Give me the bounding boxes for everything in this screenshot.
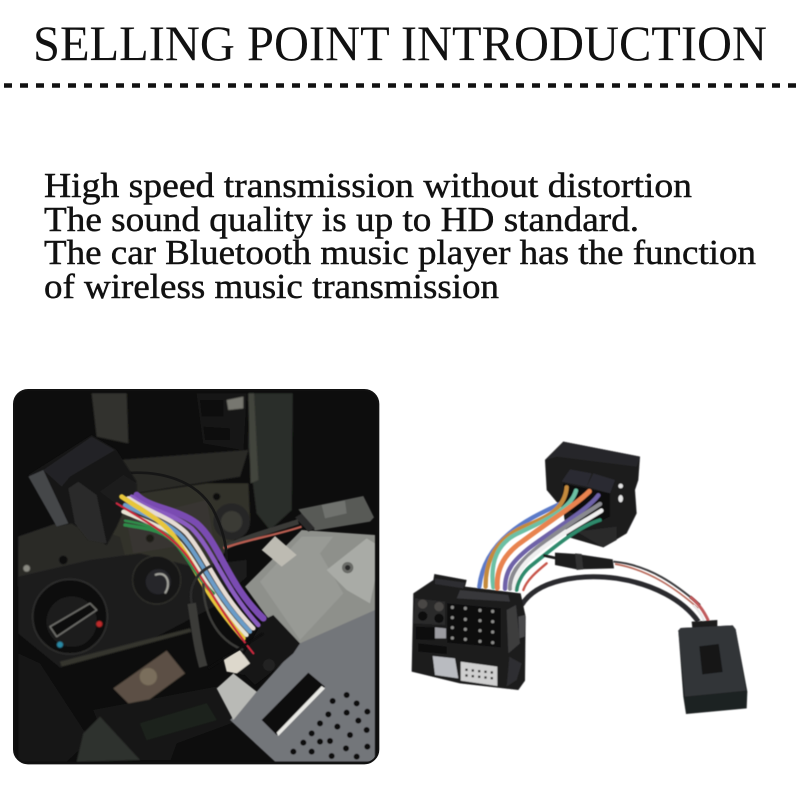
knob: lights xyxy=(133,556,181,604)
text block: selling point description: The sound quality is up to HD standard. xyxy=(44,200,639,239)
knob: upper xyxy=(213,503,250,540)
pillar xyxy=(248,393,293,530)
lower control panel xyxy=(18,553,247,670)
upper vent area xyxy=(92,393,128,443)
main connector xyxy=(412,574,526,690)
knob: temperature xyxy=(33,579,107,654)
text block: selling point description: High speed transmission without distortion xyxy=(44,166,692,205)
panel: bluetooth module xyxy=(678,597,747,714)
wire bundle xyxy=(479,487,601,590)
aux jack xyxy=(191,565,263,668)
text block: selling point description: of wireless music transmission xyxy=(44,267,499,306)
pocket xyxy=(60,651,124,670)
lower console xyxy=(93,687,240,760)
wire bundle xyxy=(117,495,263,653)
main black cable xyxy=(522,577,698,622)
shelf xyxy=(120,450,248,493)
left plug xyxy=(28,435,137,545)
black cable xyxy=(123,473,227,560)
text block: selling point description: The car Bluetooth music player has the function xyxy=(44,233,756,272)
panel: product harness xyxy=(412,442,700,690)
radio unit xyxy=(217,530,375,762)
screws xyxy=(23,565,30,572)
dash face xyxy=(18,483,250,587)
top connector xyxy=(545,442,640,547)
bluetooth receiver xyxy=(223,496,374,548)
panel: installation photo xyxy=(14,390,378,763)
text block: selling point description xyxy=(44,166,756,306)
rear plug xyxy=(233,615,300,685)
title: SELLING POINT INTRODUCTION xyxy=(33,15,767,71)
inline cable and plug xyxy=(543,553,700,608)
